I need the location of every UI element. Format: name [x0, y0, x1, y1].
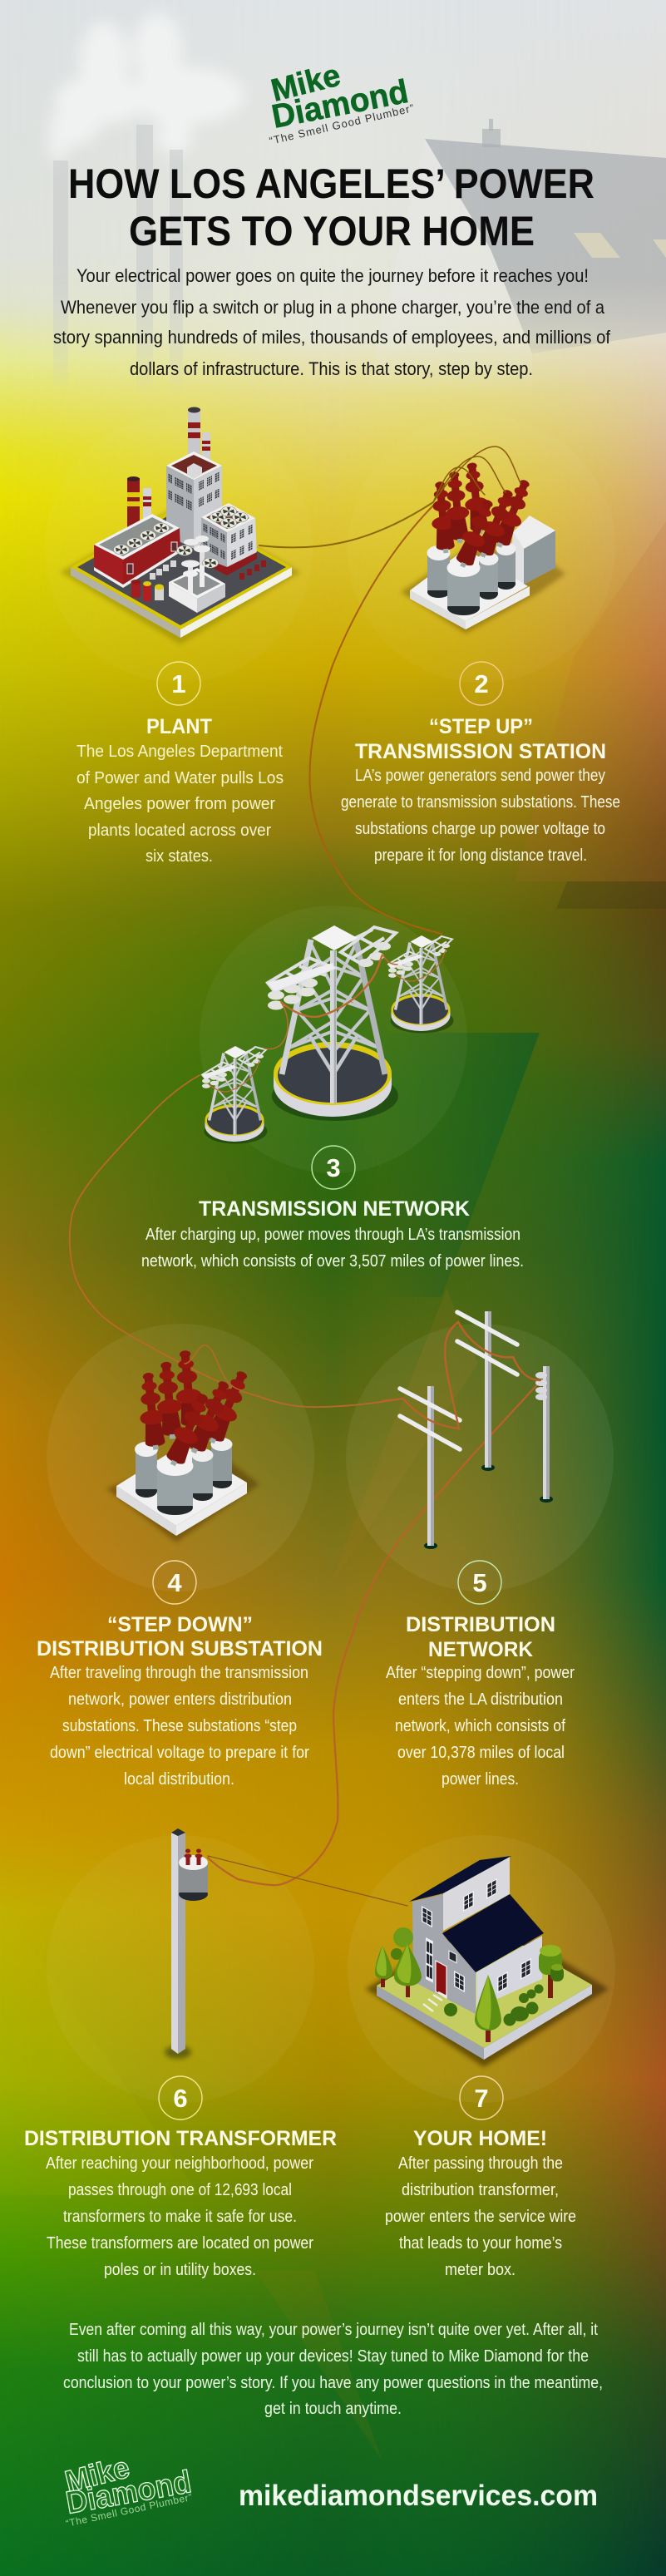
wires: [433, 447, 520, 502]
body: power enters the service wire: [385, 2208, 576, 2226]
illustration: left small tower: [202, 1046, 268, 1144]
heading: TRANSMISSION NETWORK: [199, 1197, 470, 1221]
title: HOW LOS ANGELES’ POWER: [68, 160, 594, 207]
closing paragraph: get in touch anytime.: [264, 2400, 402, 2418]
body: passes through one of 12,693 local: [68, 2181, 292, 2199]
body: [50, 1664, 309, 1789]
body: transformers to make it safe for use.: [63, 2208, 297, 2226]
footer logo: Diamond: [63, 2465, 194, 2521]
number badge 1: 1: [171, 669, 186, 698]
closing paragraph: [63, 2321, 603, 2418]
number badge 7: 7: [474, 2084, 489, 2113]
heading: TRANSMISSION STATION: [355, 740, 606, 763]
body: plants located across over: [88, 822, 271, 840]
body: prepare it for long distance travel.: [374, 846, 587, 865]
steps: [423, 1992, 446, 2011]
body: [386, 1664, 575, 1789]
intro paragraph: dollars of infrastructure. This is that story, step by step.: [130, 358, 533, 379]
illustration: right small tower: [388, 935, 454, 1033]
body: The Los Angeles Department: [76, 743, 283, 761]
body: LA’s power generators send power they: [355, 767, 605, 785]
logo: Mike Diamond: Mike: [268, 58, 344, 109]
red chimneys and building: [94, 476, 180, 588]
heading: DISTRIBUTION: [406, 1613, 555, 1636]
number badge 1: [157, 662, 200, 705]
body: [341, 767, 620, 865]
number badge 4: 4: [167, 1568, 182, 1597]
body: network, which consists of: [395, 1717, 565, 1735]
title: [68, 160, 594, 254]
number badge 2: [460, 662, 503, 705]
cooled mid building: [201, 503, 257, 575]
pole: right with insulator: [535, 1366, 550, 1499]
number badge 5: 5: [472, 1568, 487, 1597]
heading: [37, 1613, 323, 1661]
cylinders: [427, 542, 516, 615]
step 7: your home: [385, 2076, 576, 2279]
cylinders: [135, 1438, 233, 1515]
body: After charging up, power moves through LA’s transmission: [146, 1226, 520, 1244]
heading: “STEP DOWN”: [107, 1613, 253, 1636]
body: poles or in utility boxes.: [104, 2261, 256, 2279]
body: After “stepping down”, power: [386, 1664, 575, 1682]
step 4: step down: [37, 1561, 323, 1789]
body: that leads to your home’s: [399, 2234, 562, 2253]
title: GETS TO YOUR HOME: [129, 208, 535, 254]
body: substations charge up power voltage to: [355, 820, 605, 838]
body: generate to transmission substations. These: [341, 793, 620, 812]
heading: [406, 1613, 555, 1661]
number badge 4: [153, 1561, 196, 1604]
power wire path: plant to transmission to poles to home: [70, 502, 540, 1906]
illustration: pole transformer: [165, 1828, 208, 2059]
house walls and roof: [409, 1856, 544, 2014]
body: distribution transformer,: [402, 2181, 559, 2199]
body: down” electrical voltage to prepare it for: [50, 1744, 309, 1762]
pole: back: [457, 1311, 517, 1468]
intro paragraph: story spanning hundreds of miles, thousands of employees, and millions of: [53, 327, 611, 348]
wires: [185, 1345, 241, 1390]
body: [385, 2154, 576, 2279]
number badge 7: [460, 2076, 503, 2120]
closing paragraph: still has to actually power up your devices! Stay tuned to Mike Diamond for the: [77, 2347, 589, 2366]
number badge 3: [312, 1146, 355, 1189]
illustration: large transmission tower: [268, 925, 398, 1121]
number badge 5: [458, 1561, 501, 1604]
heading: YOUR HOME!: [413, 2127, 547, 2150]
tower link wires: [264, 955, 397, 1049]
illustration: step-down substation: [106, 1345, 259, 1542]
heading: NETWORK: [428, 1638, 533, 1661]
front concrete box: [169, 565, 225, 613]
body: After passing through the: [398, 2154, 563, 2173]
heading: DISTRIBUTION SUBSTATION: [37, 1637, 323, 1661]
towers with dishes: [176, 535, 218, 595]
tanks and barrels: [131, 560, 266, 601]
closing paragraph: Even after coming all this way, your power’s journey isn’t quite over yet. After all, it: [69, 2321, 598, 2339]
insulators: [136, 1350, 254, 1470]
step 5: distribution network: [386, 1561, 575, 1789]
number badge 6: 6: [173, 2084, 188, 2113]
body: meter box.: [445, 2261, 516, 2279]
body: After traveling through the transmission: [50, 1664, 308, 1682]
heading: “STEP UP”: [429, 715, 533, 738]
body: local distribution.: [124, 1770, 234, 1789]
heading: PLANT: [146, 715, 212, 738]
number badge 6: [159, 2076, 202, 2120]
tall building: [166, 407, 222, 549]
website url: mikediamondservices.com: [239, 2480, 598, 2512]
logo: Mike Diamond: Diamond: [269, 73, 412, 136]
illustration: distribution poles: [382, 1311, 553, 1549]
body: [46, 2154, 313, 2279]
intro paragraph: [53, 265, 611, 379]
number badge 3: 3: [326, 1153, 341, 1182]
body: substations. These substations “step: [62, 1717, 297, 1735]
illustration: power plant: [60, 407, 301, 644]
body: [76, 743, 284, 866]
body: These transformers are located on power: [47, 2234, 313, 2253]
body: enters the LA distribution: [398, 1690, 563, 1709]
body: power lines.: [442, 1770, 519, 1789]
heading: [355, 715, 606, 763]
body: of Power and Water pulls Los: [76, 769, 284, 787]
footer logo: “The Smell Good Plumber”: [65, 2491, 193, 2529]
body: network, power enters distribution: [68, 1690, 292, 1709]
body: [141, 1226, 524, 1271]
footer logo: Mike: [62, 2450, 133, 2499]
logo: Mike Diamond: “The Smell Good Plumber”: [268, 101, 415, 147]
body: network, which consists of over 3,507 miles of power lines.: [141, 1252, 524, 1271]
body: six states.: [146, 847, 213, 866]
backdrop circles behind illustrations: [45, 415, 615, 2103]
intro paragraph: Your electrical power goes on quite the journey before it reaches you!: [76, 265, 589, 286]
heading: DISTRIBUTION TRANSFORMER: [24, 2127, 337, 2150]
step 6: distribution transformer: [24, 2076, 337, 2279]
body: over 10,378 miles of local: [397, 1744, 565, 1762]
illustration: house: [366, 1856, 609, 2067]
intro paragraph: Whenever you flip a switch or plug in a phone charger, you’re the end of a: [61, 297, 605, 318]
pole: front: [400, 1386, 460, 1546]
step 3: transmission network: [141, 1146, 524, 1271]
illustration: step-up substation: [401, 447, 565, 634]
closing paragraph: conclusion to your power’s story. If you have any power questions in the meantime,: [63, 2374, 603, 2392]
trees and bushes: [375, 1927, 564, 2042]
insulators: [428, 461, 536, 571]
header photo: power plant and house: [48, 12, 666, 399]
step 2: step up: [341, 662, 620, 865]
pole wires: [382, 1322, 540, 1429]
footer logo: [62, 2450, 194, 2529]
step 1: plant: [76, 662, 284, 866]
body: After reaching your neighborhood, power: [46, 2154, 313, 2173]
number badge 2: 2: [474, 669, 489, 698]
side box: [509, 516, 555, 585]
body: Angeles power from power: [84, 795, 275, 813]
